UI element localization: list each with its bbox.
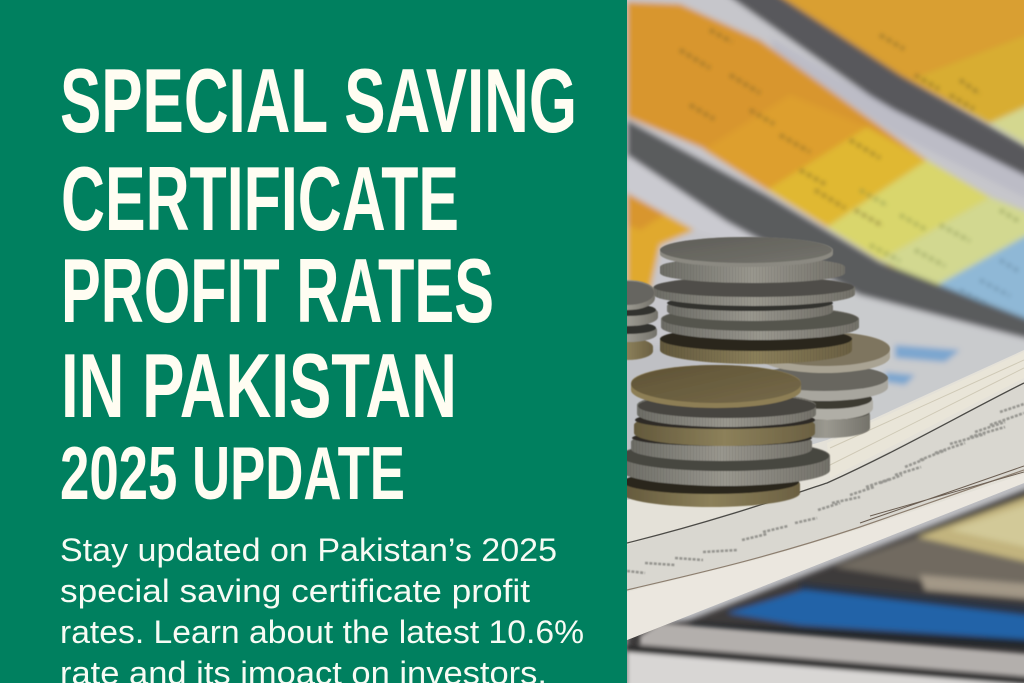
paper background xyxy=(627,79,1024,683)
blurred magazine below papers xyxy=(627,484,1024,683)
subheading: 2025 update: 2025 UPDATE xyxy=(60,431,405,515)
table row text smudges xyxy=(680,30,1020,304)
description text: rates. Learn about the latest 10.6% xyxy=(60,614,584,650)
coin stack: back right xyxy=(760,332,890,438)
title: IN PAKISTAN xyxy=(61,336,457,437)
description text: special saving certificate profit xyxy=(60,573,530,609)
description text xyxy=(60,532,584,683)
description text: Stay updated on Pakistan’s 2025 xyxy=(60,532,557,568)
coin stack: left xyxy=(627,280,658,361)
blurred rate table sheets xyxy=(600,0,1024,460)
photo: coins stacked on financial papers xyxy=(627,0,1024,683)
lower stack of paper xyxy=(627,623,1024,683)
title xyxy=(60,51,577,437)
newspaper text rows xyxy=(627,404,1024,573)
coin stack: front xyxy=(620,365,830,507)
panel: green title panel xyxy=(0,0,627,683)
newspaper sheets xyxy=(627,350,1024,640)
coin stack: back centre xyxy=(653,237,859,364)
